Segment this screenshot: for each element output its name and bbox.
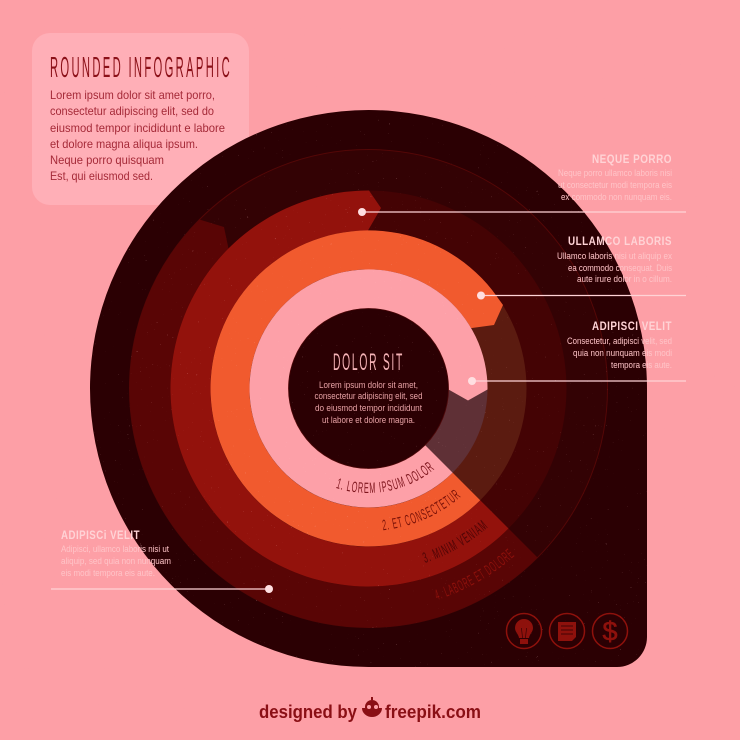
center text: do eiusmod tempor incididunt [315,403,422,414]
callout: neque porro: ut consectetur modi tempora eis [558,180,672,191]
outer dark shape [90,110,647,667]
center text: consectetur adipiscing elit, sed [314,391,422,402]
center text [314,380,422,426]
callout: neque porro: ex commodo non nunquam eis. [561,192,672,203]
footer credit [259,697,481,722]
intro text: et dolore magna aliqua ipsum. [50,137,198,151]
ring 4: backdrop [130,150,608,628]
callout: ullamco laboris [477,234,686,300]
callout: adipisci velit: Consectetur, adipisci velit, sed [567,336,672,347]
callout: neque porro: Neque porro ullamco laboris nisi [558,168,672,179]
text: ROUNDED INFOGRAPHIC [50,52,232,84]
intro text: Neque porro quisquam [50,153,164,167]
callout: adipisci velit left: eis modi tempora eis aute. [61,568,155,579]
callout: ullamco laboris: Ullamco laboris nisi ut aliquip ex [557,251,672,262]
callout: neque porro [358,152,686,216]
icon: dollar [592,614,628,648]
intro text: eiusmod tempor incididunt e labore [50,121,225,135]
ring 3: red segment [170,190,508,586]
curved label 4: 4. LABORE ET DOLORE [436,548,514,600]
intro text: Est, qui eiusmod sed. [50,169,153,183]
ring 2: backdrop [210,230,526,546]
panel: title card [32,33,249,205]
callout: neque porro: NEQUE PORRO [592,152,672,166]
center text: Lorem ipsum dolor sit amet, [319,380,418,391]
callout: ullamco laboris: ea commodo consequat. Duis [568,263,672,274]
callout: adipisci velit left: ADIPISCi VELIT [61,528,140,542]
callout: adipisci velit: quia non nunquam eis modi [573,348,672,359]
ring 3: backdrop [170,190,566,586]
callout: adipisci velit left [51,528,273,593]
curved label 3: 3. MINIM VENIAM [422,520,488,563]
curved label 2: 2. ET CONSECTETUR [382,490,461,530]
text: DOLOR SIT [333,349,404,376]
callout: adipisci velit left: Adipisci, ullamco laboris nisi ut [61,544,169,555]
speckle texture [80,100,660,680]
callout: adipisci velit: tempora eis aute. [611,360,672,371]
callout: adipisci velit left: aliquip, sed quia non nunquam [61,556,171,567]
intro text: consectetur adipiscing elit, sed do [50,104,214,118]
ring 1: backdrop [250,270,488,508]
callout: adipisci velit: ADIPISCI VELIT [592,319,672,333]
intro text: Lorem ipsum dolor sit amet porro, [50,88,215,102]
center circle [288,308,448,468]
ring 1: pink segment [250,269,488,507]
icon: light bulb [506,614,542,648]
footer credit: designed by [259,701,358,722]
ring 2: orange segment [211,230,503,546]
icon: note [550,614,584,648]
footer credit: freepik.com [385,701,481,722]
callout: ullamco laboris: aute irure dolor in o cillum. [577,274,672,285]
intro text [50,88,225,183]
icon: dollar: $ [602,616,618,646]
icon: freepik logo [362,697,382,717]
curved label 1: 1. LOREM IPSUM DOLOR [336,462,434,493]
callout: adipisci velit [468,319,686,385]
ring 4: dark red segment [129,220,538,628]
center text: ut labore et dolore magna. [322,415,415,426]
callout: ullamco laboris: ULLAMCO LABORIS [568,234,672,248]
